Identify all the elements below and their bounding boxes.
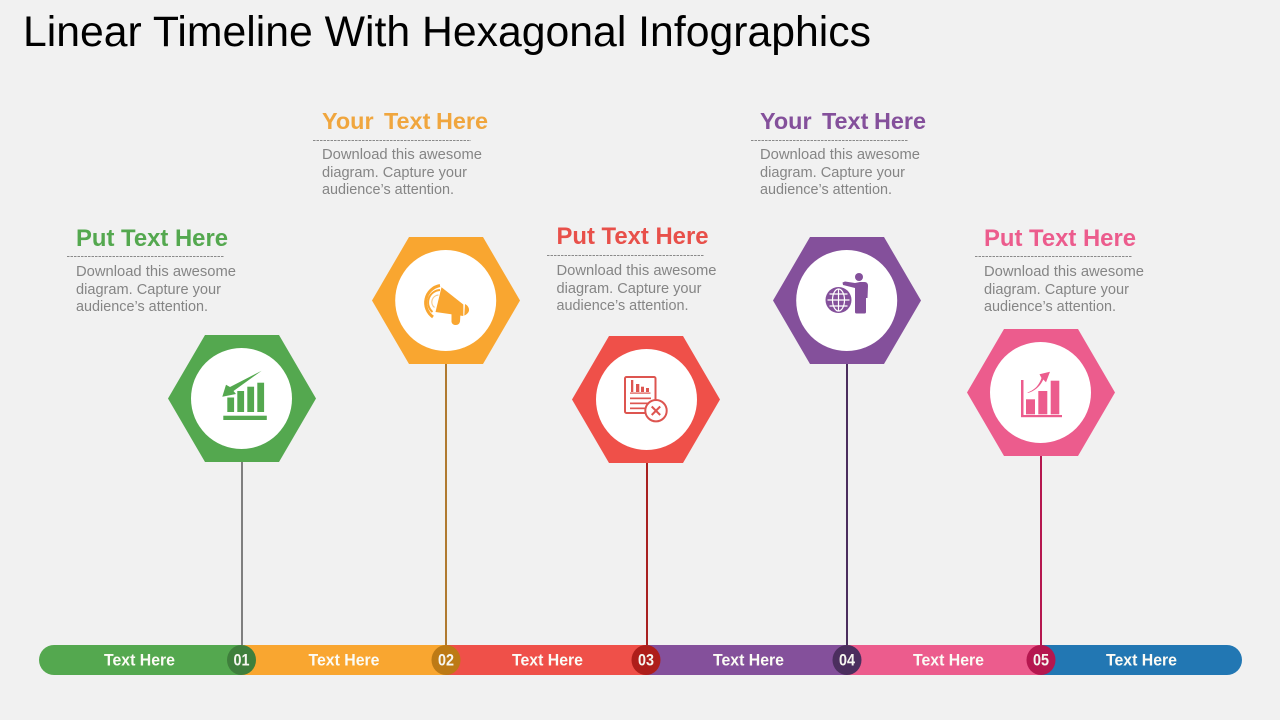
- bar label 6: Text Here: [1106, 652, 1177, 670]
- text block: step 3: Download this awesome: [556, 263, 716, 279]
- number badge 04: [832, 645, 862, 675]
- text block: step 1: Put Text Here: [76, 225, 228, 252]
- text block: step 3: diagram. Capture your: [556, 281, 702, 297]
- bar label 1: Text Here: [104, 652, 175, 670]
- title: Linear Timeline With Hexagonal Infographics: [23, 8, 871, 56]
- bar label 3: Text Here: [512, 652, 583, 670]
- text block: step 3: audience’s attention.: [556, 298, 688, 314]
- text block: step 4: audience’s attention.: [760, 182, 892, 198]
- hexagon 3 with report cancel icon: [572, 336, 720, 463]
- icon: bar chart with down arrow: [222, 371, 267, 420]
- text block: step 4: [751, 108, 926, 198]
- text block: step 2: audience’s attention.: [322, 182, 454, 198]
- text block: step 4: Your: [760, 108, 812, 134]
- bar label 2: Text Here: [308, 652, 380, 670]
- connector line 04: [846, 362, 848, 648]
- text block: step 2: diagram. Capture your: [322, 165, 467, 181]
- bar label 5: Text Here: [913, 652, 984, 670]
- number badge 01: [227, 645, 256, 675]
- hexagon 2 with megaphone icon: [372, 237, 520, 364]
- text block: step 2: [313, 108, 488, 198]
- icon: person presenting globe: [826, 273, 868, 314]
- text block: step 2: Here: [436, 108, 488, 134]
- text block: step 4: diagram. Capture your: [760, 165, 905, 181]
- text block: step 3: Put Text Here: [556, 223, 708, 250]
- hexagon 5 with rising chart icon: [967, 329, 1115, 456]
- number badge 02: 02: [438, 652, 454, 670]
- hexagon 1 with chart arrow icon: [168, 335, 316, 462]
- text block: step 2: Text: [384, 108, 431, 134]
- text block: step 1: Download this awesome: [76, 264, 236, 280]
- connector line 01: [241, 460, 243, 648]
- text block: step 3: [547, 223, 716, 314]
- number badge 02: [432, 645, 460, 675]
- text block: step 4: Text: [822, 108, 869, 134]
- text block: step 2: Download this awesome: [322, 147, 482, 163]
- timeline bar: [39, 645, 1242, 675]
- number badge 03: 03: [638, 652, 654, 670]
- text block: step 5: diagram. Capture your: [984, 282, 1129, 298]
- text block: step 1: [67, 225, 236, 315]
- text block: step 1: diagram. Capture your: [76, 282, 221, 298]
- number badge 05: [1026, 645, 1056, 675]
- hexagon 4 with globe presenter icon: [773, 237, 921, 364]
- text block: step 5: [975, 225, 1144, 315]
- number badge 03: [632, 645, 660, 675]
- text block: step 5: Download this awesome: [984, 264, 1144, 280]
- icon: rising bar chart: [1021, 372, 1062, 417]
- text block: step 4: Download this awesome: [760, 147, 920, 163]
- bar label 4: Text Here: [713, 652, 784, 670]
- text block: step 5: audience’s attention.: [984, 299, 1116, 315]
- number badge 01: 01: [234, 652, 250, 670]
- text block: step 1: audience’s attention.: [76, 299, 208, 315]
- connector line 05: [1040, 454, 1042, 648]
- connector line 02: [445, 362, 447, 648]
- text block: step 2: Your: [322, 108, 374, 134]
- number badge 05: 05: [1033, 652, 1049, 670]
- icon: report with cross: [625, 377, 667, 421]
- number badge 04: 04: [839, 652, 856, 670]
- connector line 03: [646, 461, 648, 648]
- icon: megaphone: [426, 286, 469, 325]
- text block: step 5: Put Text Here: [984, 225, 1136, 252]
- text block: step 4: Here: [874, 108, 926, 134]
